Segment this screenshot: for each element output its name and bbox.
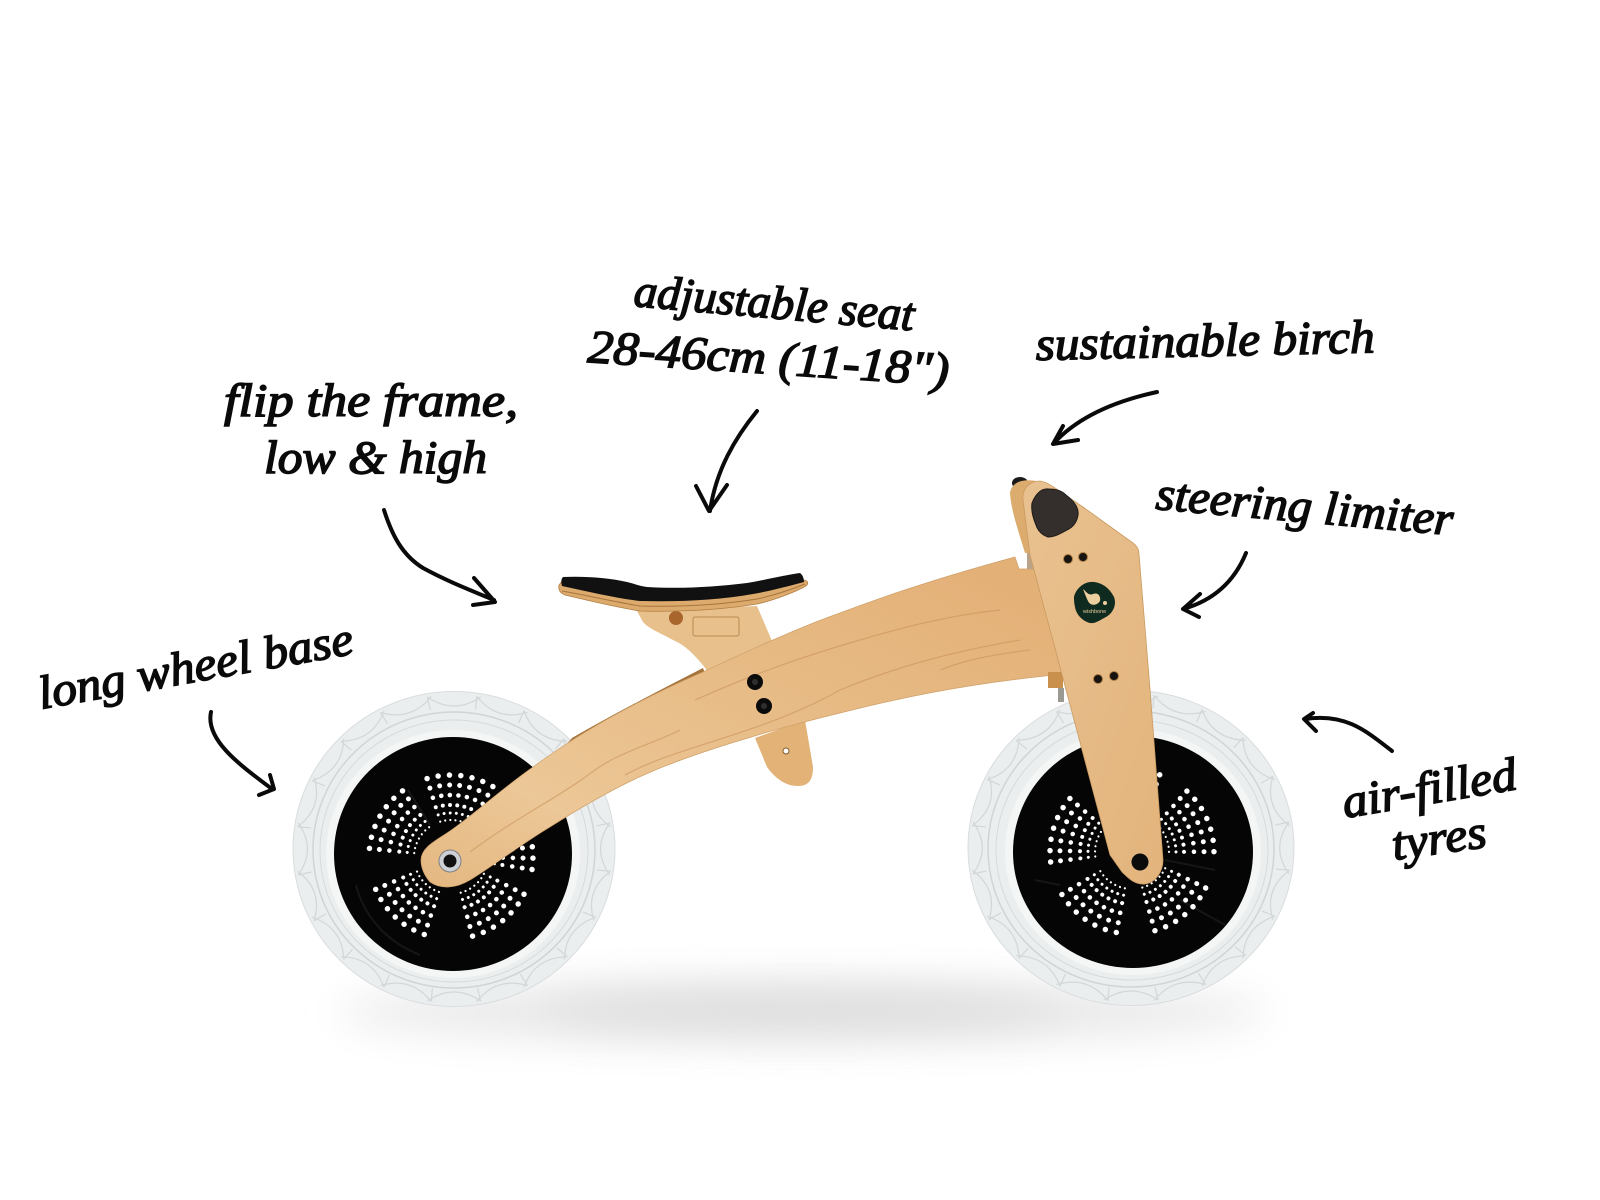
ground shadow — [338, 982, 1268, 1042]
arrow: steering limiter — [1183, 553, 1246, 617]
rear wheel — [293, 692, 615, 1006]
front wheel — [968, 690, 1294, 1006]
label: low and high: low & high — [264, 432, 487, 484]
rear hub shading — [356, 790, 430, 955]
rear hub — [334, 737, 572, 971]
front hub perforations — [1044, 768, 1220, 938]
arrow: sustainable birch — [1053, 392, 1157, 444]
label: steering limiter: steering limiter — [1154, 468, 1456, 546]
lower frame tail — [755, 720, 813, 786]
label: sustainable birch: sustainable birch — [1035, 311, 1375, 371]
seat post label — [669, 611, 739, 636]
rear tyre — [293, 692, 615, 1006]
label: tyres: tyres — [1388, 806, 1490, 871]
front hub — [1013, 736, 1253, 968]
frame back edge — [556, 668, 706, 756]
seat pad — [561, 573, 804, 601]
label: long wheel base: long wheel base — [34, 613, 357, 720]
label: adjustable seat: adjustable seat — [632, 265, 917, 342]
seat post — [637, 606, 778, 685]
front fork — [1023, 481, 1163, 884]
seat wood base — [559, 580, 808, 611]
fork knob — [1032, 489, 1078, 537]
rear hub perforations — [363, 772, 539, 942]
frame bolts — [747, 674, 772, 714]
fork bolts — [1064, 552, 1148, 870]
seat ply line — [562, 584, 805, 606]
front hub shading — [1035, 860, 1225, 925]
arrow: long wheel base — [210, 712, 274, 795]
arrow: flip the frame — [384, 510, 495, 605]
wood grain — [470, 610, 1030, 852]
label: flip the frame: flip the frame, — [224, 375, 518, 427]
tail hole — [783, 748, 789, 754]
label: air-filled: air-filled — [1338, 748, 1521, 829]
arrow: adjustable seat — [696, 411, 757, 511]
logo badge — [1074, 582, 1115, 623]
head tube back plate — [1010, 477, 1036, 569]
front tyre — [968, 690, 1294, 1006]
seat — [559, 573, 808, 611]
rear axle — [439, 850, 461, 872]
label: seat height: 28-46cm (11-18") — [586, 321, 951, 396]
arrow: air-filled tyres — [1304, 713, 1392, 751]
main frame — [421, 557, 1075, 887]
steering hardware — [1048, 672, 1064, 702]
logo badge: wishbone — [1082, 609, 1106, 615]
